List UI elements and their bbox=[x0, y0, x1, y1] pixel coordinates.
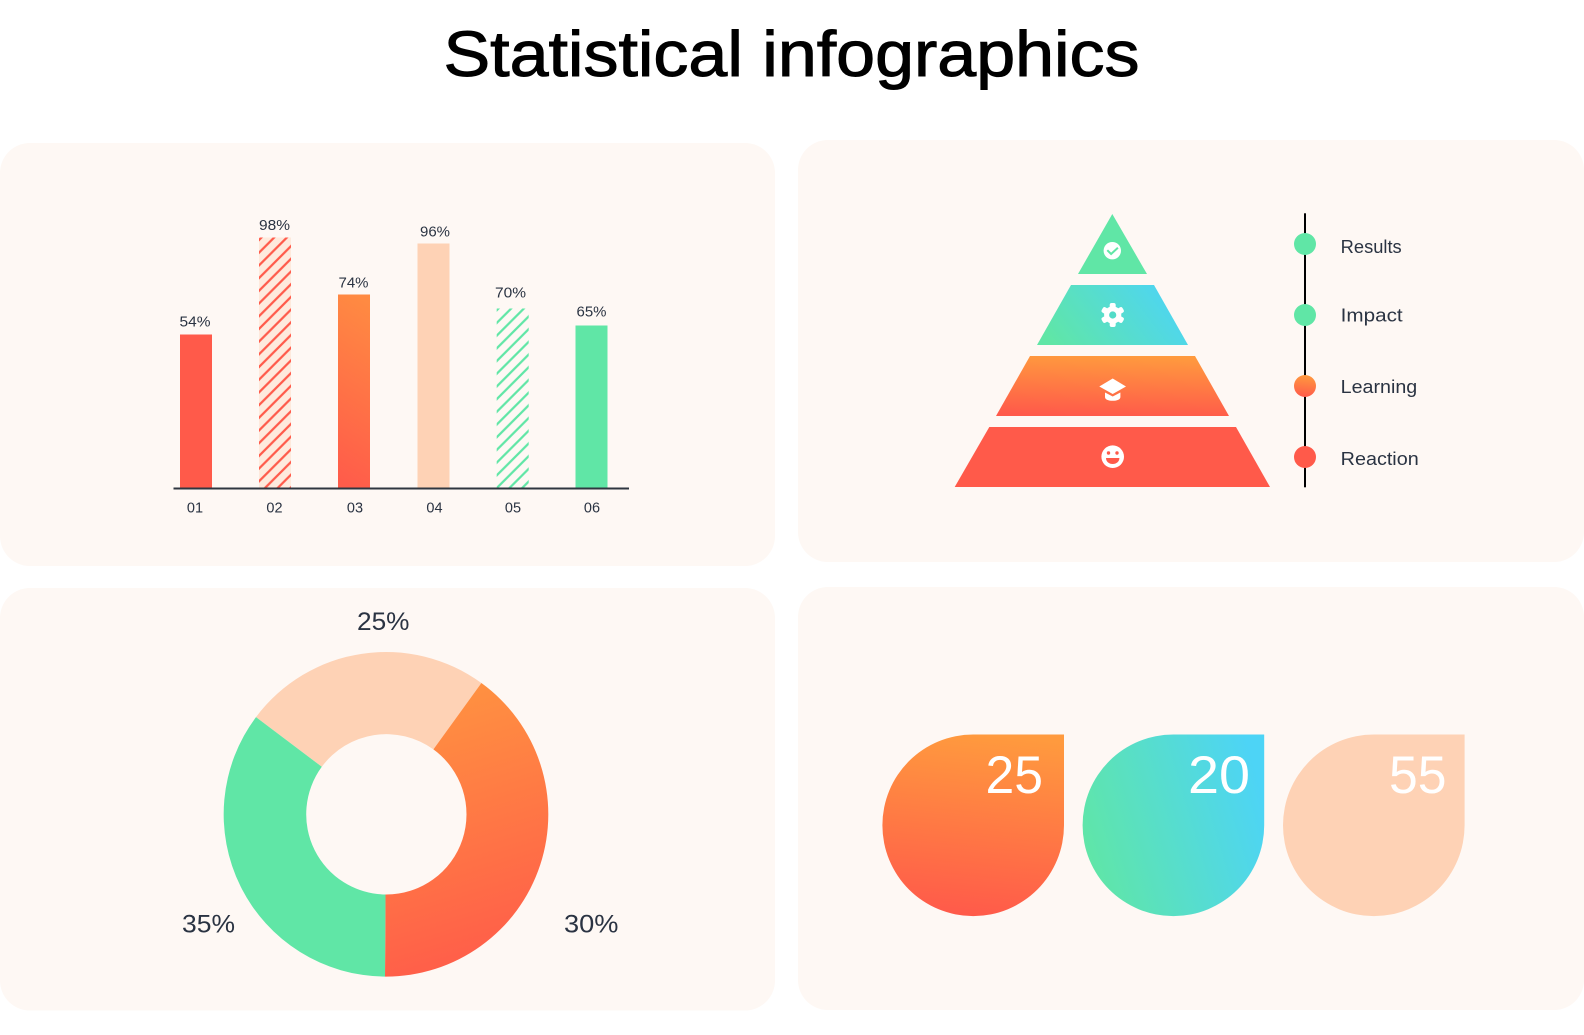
legend item: learning: Learning bbox=[1341, 377, 1417, 397]
bar 06: 65% bbox=[576, 305, 607, 321]
bar 05: 05 bbox=[505, 500, 521, 516]
bar 01 bbox=[180, 315, 212, 516]
legend line bbox=[1304, 213, 1306, 487]
drop: 25: 25 bbox=[986, 746, 1043, 805]
bar 05: 70% bbox=[495, 286, 526, 302]
chart axis bbox=[174, 488, 629, 490]
label: 35%: 35% bbox=[182, 910, 235, 938]
bar 05 bbox=[495, 286, 529, 516]
drop: 20 bbox=[1083, 734, 1264, 916]
panel: bar chart bbox=[0, 143, 775, 566]
legend item: reaction: Reaction bbox=[1341, 449, 1419, 469]
drop: 20: 20 bbox=[1188, 746, 1250, 805]
pyramid tier: learning bbox=[996, 356, 1229, 416]
panel: drop numbers bbox=[798, 587, 1584, 1010]
bar 06 bbox=[576, 305, 608, 516]
bar 02 bbox=[259, 218, 291, 516]
bar 03: 74% bbox=[338, 276, 369, 292]
title: Statistical infographics bbox=[444, 18, 1140, 90]
bar 04: 04 bbox=[426, 500, 443, 516]
donut segment: 30% bbox=[385, 683, 548, 977]
icon: check bbox=[1104, 242, 1121, 259]
bar 04 bbox=[418, 225, 450, 516]
donut segment: 25% bbox=[256, 652, 481, 767]
drop: 55: 55 bbox=[1389, 746, 1446, 805]
bar 01: 54% bbox=[180, 315, 211, 331]
pyramid tier: reaction bbox=[955, 427, 1270, 487]
drop: 55 bbox=[1283, 734, 1465, 916]
icon: smile bbox=[1101, 445, 1124, 468]
bar 04: 96% bbox=[420, 225, 450, 241]
donut segment: 35% bbox=[224, 717, 386, 977]
legend item: impact: Impact bbox=[1341, 306, 1403, 326]
pyramid tier: impact bbox=[1037, 285, 1188, 345]
icon: gear bbox=[1101, 303, 1125, 327]
legend item: impact bbox=[1294, 304, 1403, 326]
bar 03: 03 bbox=[347, 500, 363, 516]
legend item: results bbox=[1294, 233, 1402, 257]
panel: pyramid bbox=[798, 140, 1584, 562]
drop: 25 bbox=[882, 734, 1064, 916]
legend item: reaction bbox=[1294, 446, 1419, 469]
bar 02: 98% bbox=[259, 218, 290, 234]
bar 06: 06 bbox=[584, 500, 600, 516]
panel: donut chart bbox=[0, 588, 775, 1010]
bar 03 bbox=[338, 276, 370, 516]
legend item: results: Results bbox=[1341, 237, 1402, 257]
bar 02: 02 bbox=[266, 500, 283, 516]
label: 30%: 30% bbox=[564, 910, 618, 938]
legend item: learning bbox=[1294, 375, 1417, 397]
icon: graduation cap bbox=[1099, 378, 1126, 401]
pyramid tier: results bbox=[1078, 214, 1147, 274]
bar 01: 01 bbox=[187, 500, 203, 516]
label: 25%: 25% bbox=[357, 608, 410, 636]
